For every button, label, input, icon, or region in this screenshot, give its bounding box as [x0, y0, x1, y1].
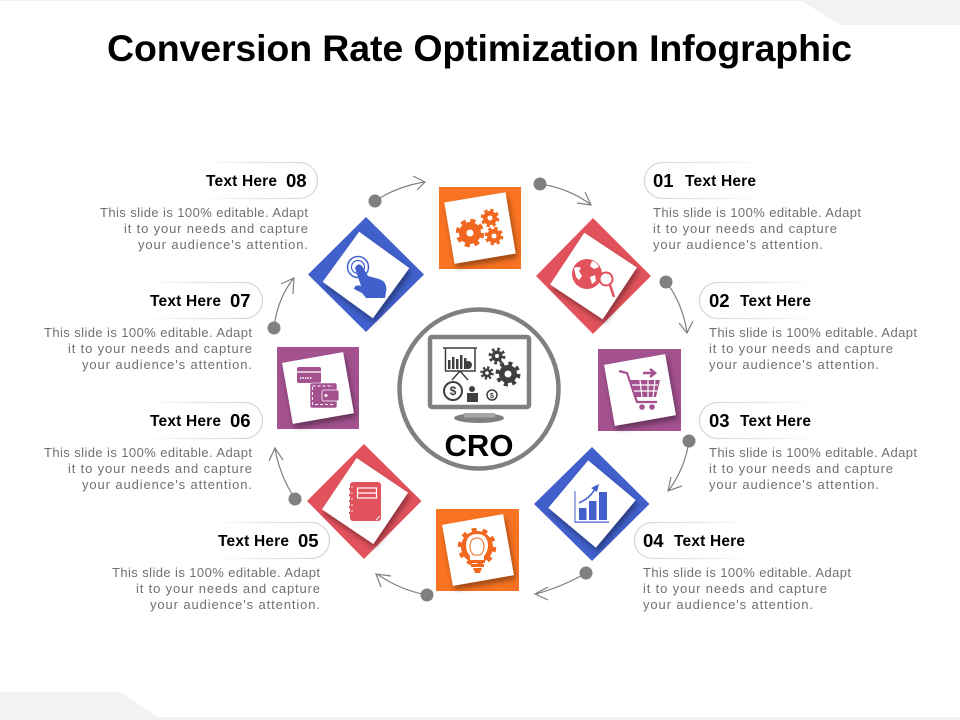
item 03: your audience's attention.: [709, 477, 879, 492]
center circle: CRO: [400, 310, 558, 468]
item 01: it to your needs and capture: [653, 221, 837, 236]
item 01: your audience's attention.: [653, 237, 823, 252]
item 02: 02: [709, 290, 730, 311]
arrow 08: [368, 176, 425, 208]
icon: gears: [458, 210, 502, 245]
item 04: Text Here: [674, 533, 745, 550]
icon: bar chart: [574, 484, 609, 523]
item 08: Text Here: [206, 173, 277, 190]
item 06: it to your needs and capture: [68, 461, 252, 476]
item 01: Text Here: [685, 173, 756, 190]
tile: blue hand: [308, 217, 424, 332]
item 02: it to your needs and capture: [709, 341, 893, 356]
item 01: [644, 162, 861, 252]
arrow 03: [668, 434, 696, 491]
item 08: 08: [286, 170, 307, 191]
icon: gear bulb: [460, 530, 494, 573]
title: Conversion Rate Optimization Infographic: [107, 27, 852, 69]
arrow 06: [269, 448, 302, 506]
icon: globe and magnifier: [572, 259, 614, 297]
item 06: 06: [230, 410, 251, 431]
item 07: Text Here: [150, 293, 221, 310]
icon: monitor: $: [450, 384, 457, 398]
arrow 04: [535, 566, 592, 600]
item 08: [100, 162, 318, 252]
item 07: [44, 282, 262, 372]
item 05: Text Here: [218, 533, 289, 550]
icon: notebook: [349, 482, 381, 521]
item 02: Text Here: [740, 293, 811, 310]
icon: monitor: [430, 337, 529, 423]
item 03: 03: [709, 410, 730, 431]
item 02: your audience's attention.: [709, 357, 879, 372]
item 02: [700, 282, 917, 372]
tile: blue chart: [534, 447, 650, 561]
item 08: This slide is 100% editable. Adapt: [100, 205, 308, 220]
item 03: This slide is 100% editable. Adapt: [709, 445, 917, 460]
item 04: 04: [643, 530, 664, 551]
item 07: your audience's attention.: [82, 357, 252, 372]
arrow 07: [268, 278, 294, 334]
item 07: 07: [230, 290, 251, 311]
item 05: your audience's attention.: [150, 597, 320, 612]
tile: red notebook: [307, 444, 422, 559]
item 04: your audience's attention.: [643, 597, 813, 612]
item 06: [44, 402, 262, 492]
tile: purple wallet: [277, 347, 359, 429]
icon: shopping cart: [619, 369, 660, 410]
item 01: 01: [653, 170, 674, 191]
item 05: 05: [298, 530, 319, 551]
item 05: [112, 522, 330, 612]
tile: orange bulb: [436, 509, 519, 591]
icon: pointing hand: [348, 256, 386, 298]
arrow 01: [534, 178, 591, 205]
tile: orange gears: [439, 187, 521, 269]
tile: purple cart: [598, 349, 681, 431]
item 03: it to your needs and capture: [709, 461, 893, 476]
item 03: [700, 402, 917, 492]
item 03: Text Here: [740, 413, 811, 430]
arrow 02: [660, 276, 693, 333]
item 04: This slide is 100% editable. Adapt: [643, 565, 851, 580]
item 01: This slide is 100% editable. Adapt: [653, 205, 861, 220]
arrow 05: [376, 574, 434, 602]
item 08: it to your needs and capture: [124, 221, 308, 236]
item 04: it to your needs and capture: [643, 581, 827, 596]
item 06: This slide is 100% editable. Adapt: [44, 445, 252, 460]
icon: monitor: $: [490, 393, 494, 400]
item 07: This slide is 100% editable. Adapt: [44, 325, 252, 340]
label: CRO: CRO: [445, 428, 513, 463]
item 05: it to your needs and capture: [136, 581, 320, 596]
item 08: your audience's attention.: [138, 237, 308, 252]
item 06: your audience's attention.: [82, 477, 252, 492]
item 07: it to your needs and capture: [68, 341, 252, 356]
item 05: This slide is 100% editable. Adapt: [112, 565, 320, 580]
item 02: This slide is 100% editable. Adapt: [709, 325, 917, 340]
item 04: [634, 522, 851, 612]
icon: wallet: [297, 367, 339, 408]
tile: red globe: [536, 218, 651, 334]
item 06: Text Here: [150, 413, 221, 430]
